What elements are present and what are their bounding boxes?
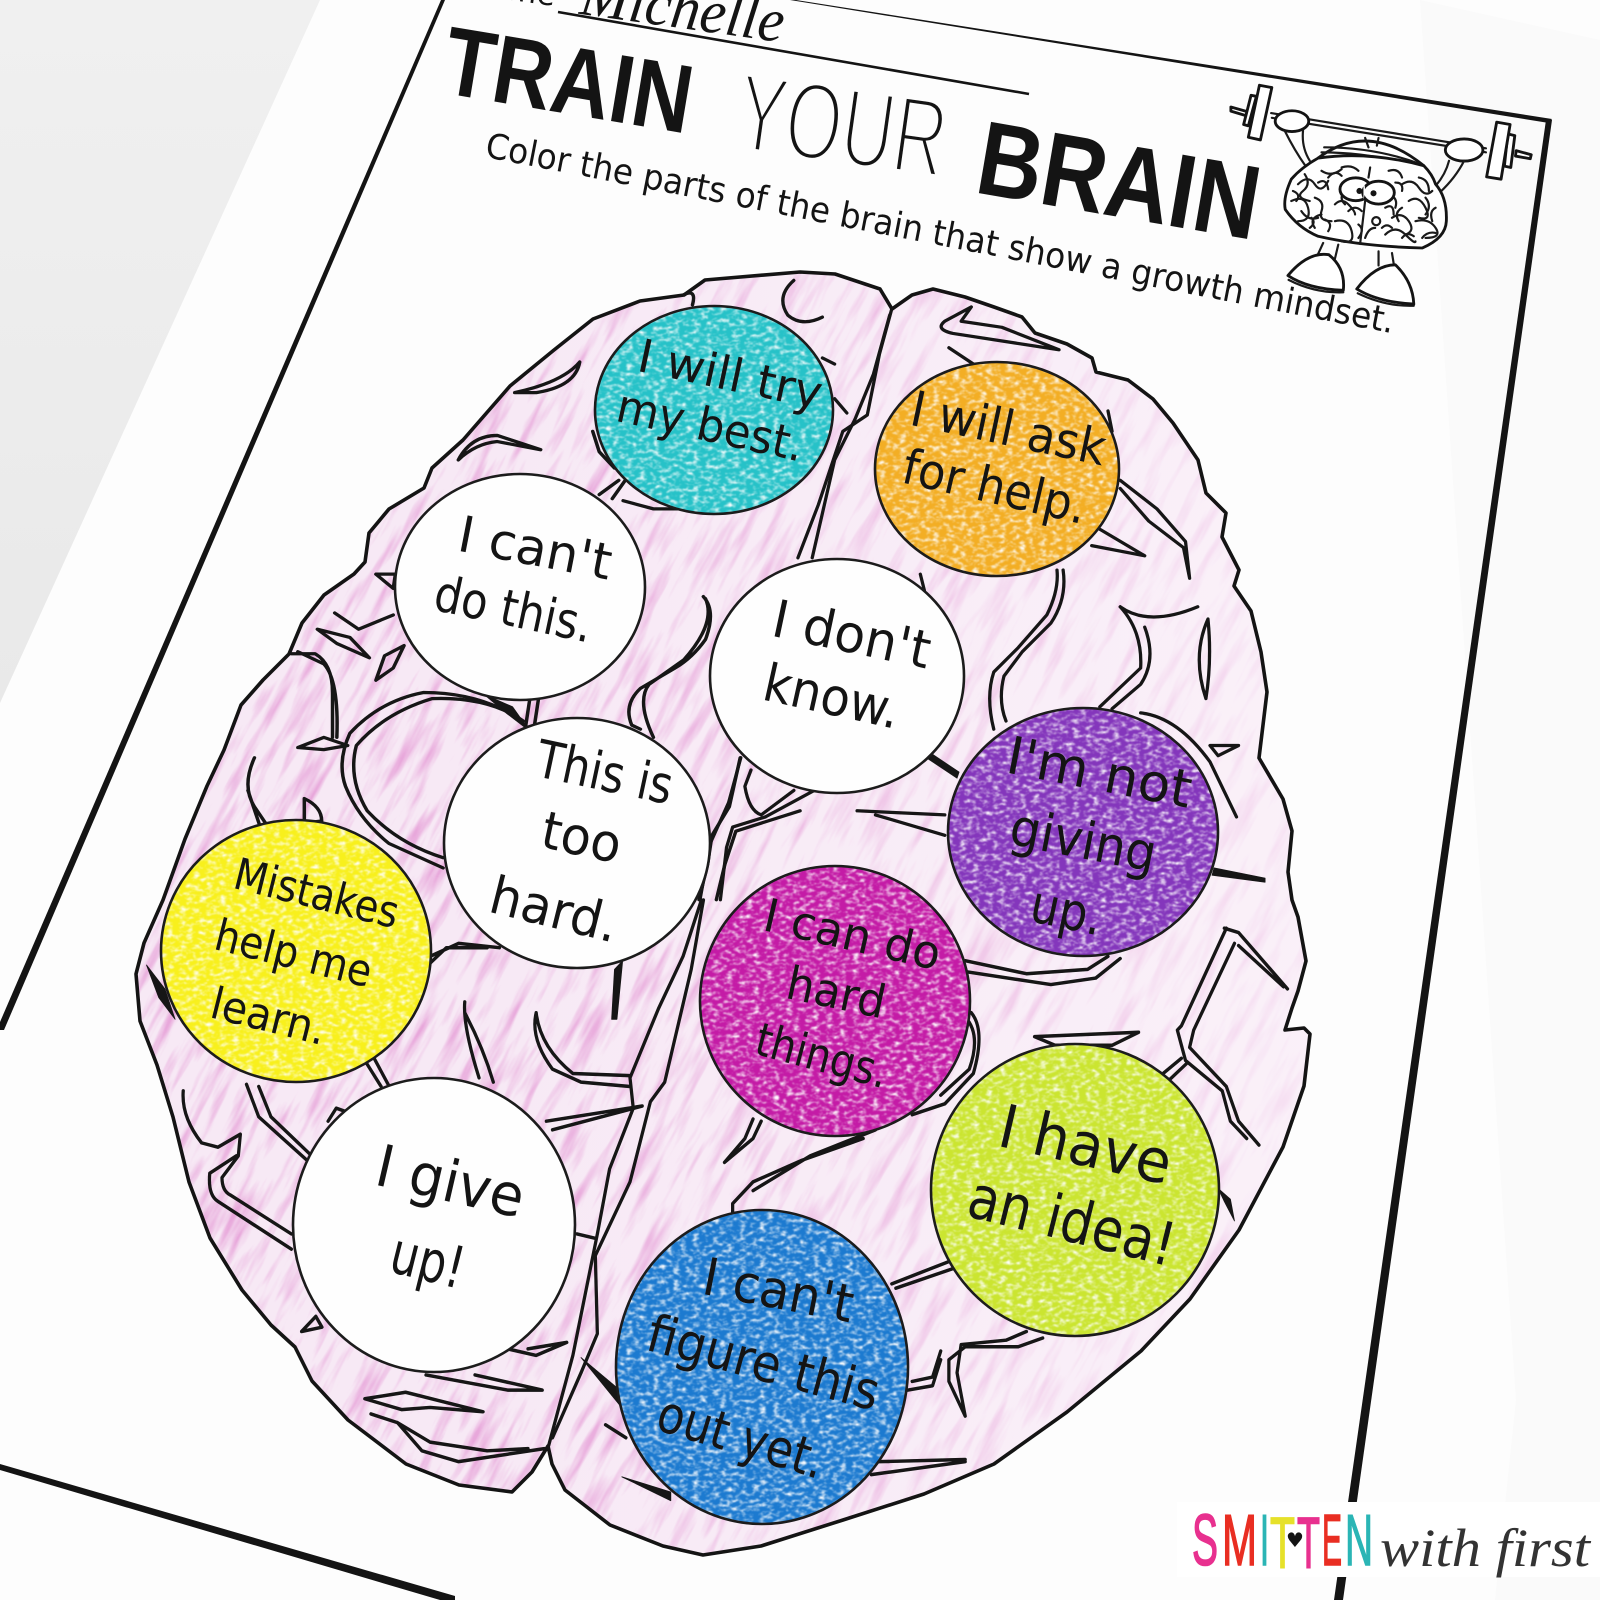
circle: I'm not giving up: giving — [1005, 798, 1162, 885]
circle: I can do hard things: hard — [782, 956, 891, 1029]
circle: I will ask for help: I will ask — [906, 380, 1112, 477]
crayon coloring on brain — [136, 272, 1310, 1555]
circle: I will try my best: I will try — [633, 328, 827, 420]
circle: Mistakes help me learn — [161, 820, 431, 1082]
brain pink base fill — [136, 272, 1310, 1555]
circle: I can do hard things: things. — [750, 1012, 894, 1099]
circle: I don't know: know. — [758, 653, 906, 742]
panel: brain diagram — [136, 272, 1310, 1555]
sulci: lower right lobe — [724, 928, 1288, 1475]
logo: Smitten with First: M — [1222, 1501, 1257, 1581]
circle: I can't do this — [395, 474, 645, 700]
logo: Smitten with First — [1177, 1501, 1600, 1584]
circle: This is too hard: This is — [530, 730, 678, 817]
circle: I have an idea: I have — [992, 1092, 1179, 1199]
icon: brain lifting barbell — [1231, 85, 1531, 306]
circle: I don't know — [710, 559, 964, 793]
circle: I can do hard things — [700, 866, 970, 1136]
logo: Smitten with First: S — [1192, 1501, 1218, 1581]
logo: Smitten with First: ♥ — [1286, 1528, 1304, 1552]
circle: I can't figure this out yet — [616, 1210, 908, 1524]
logo: Smitten with First: E — [1322, 1501, 1342, 1581]
brain outline — [136, 272, 1310, 1555]
title: TRAIN — [436, 6, 701, 154]
circle: I have an idea — [931, 1044, 1219, 1336]
logo: Smitten with First: I — [1260, 1501, 1269, 1581]
circle: I'm not giving up: I'm not — [1002, 726, 1197, 821]
logo: Smitten with First: T — [1270, 1504, 1295, 1584]
circle: I can't do this: I can't — [454, 505, 617, 592]
sulci: upper right lobe — [700, 280, 1265, 900]
circle: Mistakes help me learn: help me — [210, 910, 377, 998]
circle: I'm not giving up: up. — [1025, 875, 1108, 948]
circle: I will try my best — [595, 306, 833, 514]
logo: Smitten with First: N — [1345, 1501, 1373, 1581]
circle: Mistakes help me learn: learn. — [206, 978, 331, 1056]
underlying sheet edge — [1420, 0, 1600, 1600]
circle: I will try my best: my best. — [612, 378, 809, 472]
circle: I have an idea: an idea! — [961, 1162, 1183, 1281]
circle: I can't figure this out yet: out yet. — [650, 1384, 832, 1492]
title: YOUR — [730, 50, 955, 201]
circle: I give up — [293, 1078, 575, 1372]
circle: I can do hard things: I can do — [759, 888, 946, 981]
circle: I give up: up! — [384, 1219, 472, 1303]
title — [436, 6, 1269, 263]
logo: Smitten with First: with first — [1380, 1518, 1592, 1578]
circle: I will ask for help — [875, 362, 1119, 576]
sulci: lower left lobe — [147, 900, 703, 1501]
circle: This is too hard — [444, 718, 710, 968]
circle: This is too hard: hard. — [484, 866, 624, 955]
circle: This is too hard: too — [536, 801, 627, 876]
title: BRAIN — [969, 99, 1269, 263]
circle: I'm not giving up — [948, 708, 1218, 956]
circle: I give up: I give — [370, 1132, 531, 1232]
circle: I don't know: I don't — [767, 589, 936, 681]
subtitle instruction: Color the parts of the brain that show a growth mindset. — [482, 126, 1398, 342]
circle: I can't figure this out yet: figure this — [641, 1304, 886, 1423]
name field — [465, 0, 1029, 94]
circle: Mistakes help me learn: Mistakes — [229, 849, 404, 939]
sulci: upper left lobe — [248, 293, 800, 900]
circle: I can't do this: do this. — [429, 564, 598, 654]
logo: Smitten with First: T — [1297, 1504, 1320, 1584]
circle: I can't figure this out yet: I can't — [698, 1247, 859, 1335]
circle: I will ask for help: for help. — [897, 438, 1092, 536]
